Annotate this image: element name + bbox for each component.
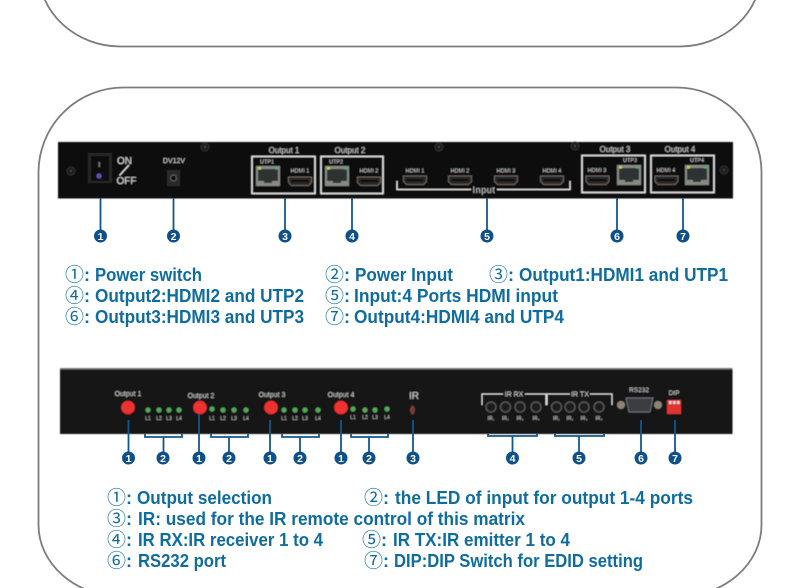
output selection buttons: Output 1 [115,391,142,398]
input LEDs: L1 [209,416,215,422]
DIP switch [667,390,681,414]
front panel callout markers: 4 [510,453,516,465]
front panel callout markers: 3 [410,453,416,465]
input ports: HDMI 2 [451,168,469,174]
icon: power switch: OFF [116,176,136,187]
front panel callout markers [122,414,682,465]
front panel legend: ⑤ [362,525,381,552]
output 3 ports [582,145,645,192]
input ports: HDMI 1 [406,168,424,174]
input LEDs: L3 [302,416,308,422]
front panel callout markers: 6 [638,453,644,465]
front panel legend: the LED of input for output 1-4 ports [395,488,693,508]
front device panel [60,368,732,434]
rear panel legend: ⑦ [325,302,344,329]
front panel legend: IR RX:IR receiver 1 to 4 [138,530,323,550]
rear panel callout markers: 2 [171,231,177,243]
input LEDs: L1 [350,415,356,421]
icon: DC power jack [163,158,185,186]
front panel legend: Output selection [137,488,272,508]
output 4 ports [651,145,714,192]
rear panel callout markers: 5 [484,231,490,243]
output 2 ports: HDMI 2 [360,168,378,174]
rear panel legend: ④ [65,281,84,308]
rear panel legend: ① [65,260,84,287]
rear panel legend: Power Input [355,265,453,285]
rear device panel [58,142,733,198]
input LEDs: L3 [372,415,378,421]
rear panel legend: : [84,265,90,285]
screws [67,142,728,175]
input LEDs: L4 [243,416,249,422]
output 2 ports: UTP2 [329,160,343,166]
front panel callout markers: 7 [672,453,678,465]
front panel callout markers: 2 [297,453,303,465]
rear panel legend: Output2:HDMI2 and UTP2 [95,286,304,306]
output 4 ports: Output 4 [665,145,696,154]
output 3 ports: UTP3 [623,158,637,164]
front panel legend: : [381,530,387,550]
rear panel callout markers: 6 [614,231,620,243]
front panel legend: : [126,488,132,508]
input LEDs: L1 [145,416,151,422]
front panel legend: IR TX:IR emitter 1 to 4 [393,530,570,550]
rear panel legend: Output4:HDMI4 and UTP4 [354,307,564,327]
input LEDs: L2 [156,416,162,422]
IR RX and TX jacks: IR₄ [595,416,603,422]
IR RX and TX jacks [482,392,612,422]
input LEDs: L3 [166,416,172,422]
front panel legend: RS232 port [138,551,226,571]
input ports: Input [472,185,496,195]
front panel legend: ④ [107,525,126,552]
rear panel legend: Power switch [95,265,202,285]
RS232 port: RS232 [629,387,649,394]
rear panel legend: : [344,307,350,327]
icon: power switch: ON [117,156,132,167]
output 4 ports: UTP4 [690,158,704,164]
front panel legend [107,483,693,573]
front panel callout markers: 2 [366,453,372,465]
front panel legend: ⑦ [364,546,383,573]
rear panel callout markers [94,198,690,243]
IR sensor [409,391,419,414]
input LEDs: L4 [384,415,390,421]
output selection buttons: Output 4 [328,392,355,399]
front panel legend: ② [364,483,383,510]
main panel outline [38,88,762,588]
output 3 ports: HDMI 3 [588,168,606,174]
rear panel legend: : [84,286,90,306]
output selection buttons: Output 2 [188,393,215,400]
front panel legend: : [126,509,132,529]
front panel callout markers: 1 [267,453,273,465]
IR RX and TX jacks: IR RX [505,392,524,398]
rear panel legend: ③ [489,260,508,287]
rear panel legend: : [344,265,350,285]
output selection buttons [115,391,355,414]
rear panel callout markers: 1 [98,231,104,243]
rear panel legend: : [84,307,90,327]
front panel legend: : [126,530,132,550]
input LEDs: L1 [281,416,287,422]
rear panel legend: ② [325,260,344,287]
front panel callout markers: 1 [338,453,344,465]
front panel legend: ① [107,483,126,510]
front panel legend: ⑥ [107,546,126,573]
RS232 port [617,387,662,412]
DIP switch: DIP [669,390,679,397]
IR RX and TX jacks: IR₁ [488,416,495,422]
front panel callout markers: 1 [196,453,202,465]
input ports [397,168,570,195]
rear panel legend: Output1:HDMI1 and UTP1 [519,265,728,285]
rear panel callout markers: 4 [349,231,355,243]
output 1 ports [252,146,315,194]
output 1 ports: HDMI 1 [291,168,309,174]
rear panel callout markers: 3 [282,231,288,243]
IR RX and TX jacks: IR TX [571,392,589,398]
rear panel legend [65,260,728,329]
front panel callout markers: 5 [576,453,582,465]
front panel legend: DIP:DIP Switch for EDID setting [394,551,643,571]
input LEDs: L2 [292,416,298,422]
input LEDs: L3 [231,416,237,422]
IR RX and TX jacks: IR₁ [553,416,560,422]
front panel callout markers: 2 [226,453,232,465]
front panel legend: : [126,551,132,571]
rear panel legend: ⑤ [325,281,344,308]
output 2 ports [321,146,383,194]
input ports: HDMI 4 [543,168,561,174]
front panel callout markers: 2 [160,453,166,465]
front panel callout markers: 1 [126,453,132,465]
icon: power switch [88,153,136,187]
front panel legend: : [383,488,389,508]
rear panel legend: ⑥ [65,302,84,329]
IR RX and TX jacks: IR₄ [532,416,540,422]
output 1 ports: Output 1 [269,146,300,155]
rear panel legend: : [508,265,514,285]
front panel legend: IR: used for the IR remote control of this matrix [138,509,525,529]
icon: DC power jack: DV12V [163,158,185,165]
IR RX and TX jacks: IR₃ [516,416,524,422]
IR RX and TX jacks: IR₂ [567,416,574,422]
input ports: HDMI 3 [497,168,515,174]
output 4 ports: HDMI 4 [657,168,675,174]
top panel outline [38,0,762,46]
IR RX and TX jacks: IR₃ [580,416,588,422]
input LEDs [145,406,390,422]
rear panel callout markers: 7 [680,231,686,243]
rear panel legend: : [344,286,350,306]
input LEDs: L2 [362,415,368,421]
rear panel legend: Input:4 Ports HDMI input [354,286,558,306]
input LEDs: L4 [315,416,321,422]
output 2 ports: Output 2 [335,146,366,155]
output selection buttons: Output 3 [259,392,286,399]
IR sensor: IR [409,391,419,402]
front panel legend: : [383,551,389,571]
input LEDs: L4 [176,416,182,422]
IR RX and TX jacks: IR₂ [502,416,509,422]
input LEDs: L2 [220,416,226,422]
output 3 ports: Output 3 [600,145,631,154]
rear panel legend: Output3:HDMI3 and UTP3 [95,307,304,327]
output 1 ports: UTP1 [260,160,274,166]
front panel legend: ③ [107,504,126,531]
